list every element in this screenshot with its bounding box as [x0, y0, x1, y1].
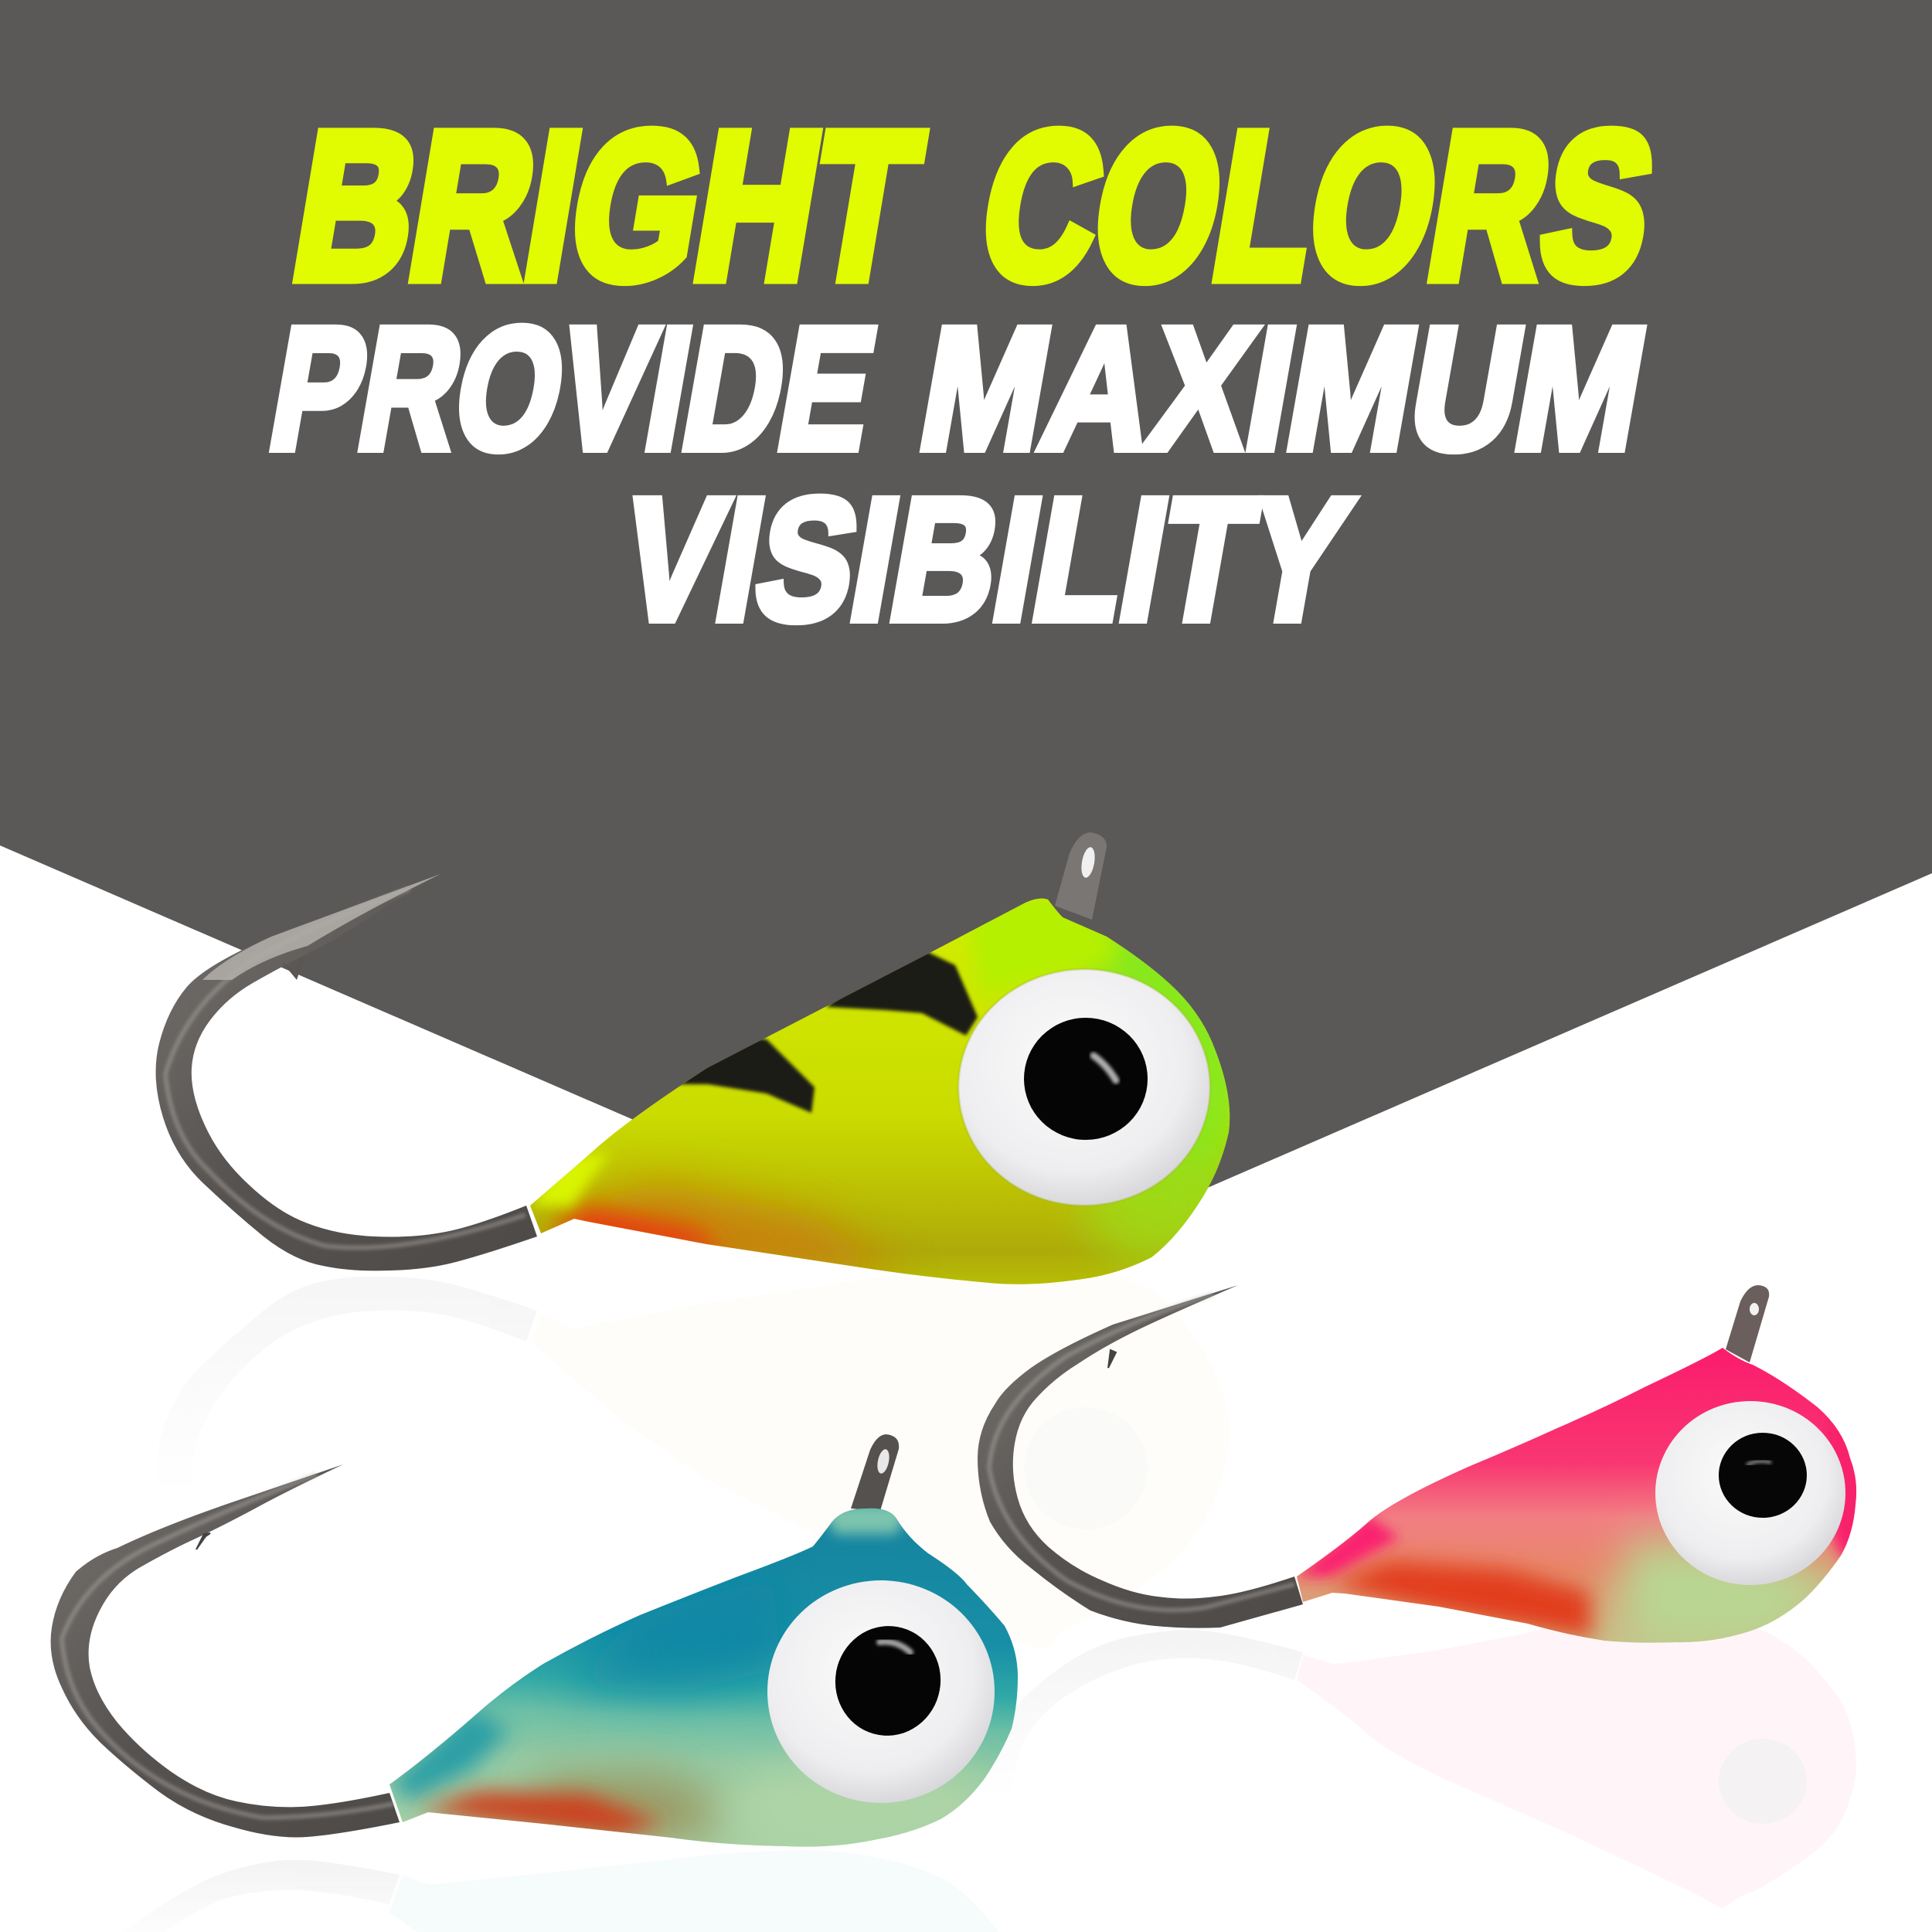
heading line 2: PROVIDE MAXIMUM: MAXIMUM	[908, 292, 1659, 485]
eye: pink jig	[1655, 1401, 1845, 1585]
heading line 1: BRIGHT COLORS: COLORS	[967, 90, 1669, 322]
hook: pink jig	[978, 1285, 1303, 1628]
body: pink jig	[1297, 1348, 1856, 1643]
reflection: blue jig	[124, 1850, 998, 1932]
background: dark gray chevron panel	[0, 0, 1932, 1278]
heading line 1: BRIGHT COLORS	[280, 90, 1669, 322]
hook: yellow jig	[156, 874, 537, 1270]
jig: yellow and green	[156, 832, 1252, 1291]
jig: pink and green	[978, 1285, 1878, 1654]
eye: yellow jig	[958, 969, 1210, 1206]
eyelet: blue jig	[851, 1434, 899, 1511]
reflection: yellow jig	[156, 1263, 1230, 1673]
eye: blue jig	[767, 1580, 995, 1803]
eyelet: pink jig	[1726, 1285, 1769, 1362]
jig: blue and mint	[51, 1434, 1028, 1855]
heading: bright colors provide maximum visibility	[258, 90, 1669, 656]
heading line 1: BRIGHT COLORS: BRIGHT	[280, 90, 934, 322]
heading line 3: VISIBILITY: VISIBILITY	[609, 463, 1363, 656]
eyelet: yellow jig	[1055, 832, 1107, 920]
reflection: pink jig	[981, 1614, 1856, 1932]
heading line 2: PROVIDE MAXIMUM: PROVIDE	[258, 292, 889, 485]
hook: blue jig	[51, 1464, 400, 1837]
body: yellow jig	[530, 898, 1230, 1284]
body: blue jig	[386, 1503, 1028, 1855]
heading line 2: PROVIDE MAXIMUM	[258, 292, 1659, 485]
